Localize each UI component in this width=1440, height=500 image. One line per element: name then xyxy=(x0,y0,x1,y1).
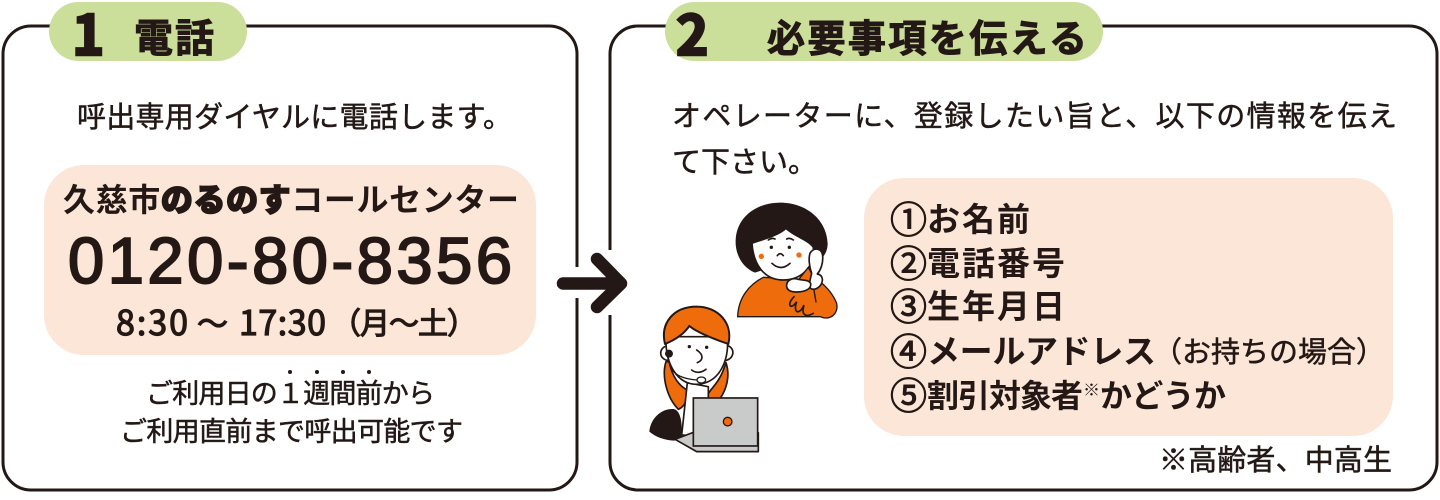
hand xyxy=(787,279,811,292)
hair xyxy=(736,203,828,273)
item 5 xyxy=(890,366,1226,420)
phone cord xyxy=(790,297,813,315)
phone number: 0120-80-8356 xyxy=(68,224,512,297)
start time: 8:30 xyxy=(116,296,188,345)
facial features xyxy=(759,238,802,267)
right hair xyxy=(707,363,728,399)
number 3: ③ xyxy=(890,277,927,331)
item 2 xyxy=(890,234,1065,288)
end time: 17:30 xyxy=(239,296,326,345)
asterisk: ※ xyxy=(1083,376,1100,401)
heading pill xyxy=(49,2,247,61)
sleeve behind phone xyxy=(799,267,815,285)
panel: step 2 tell required items xyxy=(610,0,1437,490)
label suffix: かどうか xyxy=(1100,371,1226,417)
face xyxy=(666,337,728,384)
item 4 xyxy=(890,322,1385,376)
panel frame xyxy=(3,26,577,490)
instruction text xyxy=(672,93,1397,181)
label: phone number: 電話番号 xyxy=(927,237,1065,285)
days: （月～土） xyxy=(331,299,477,343)
arrow: step 1 to step 2 xyxy=(563,259,621,307)
sweater xyxy=(738,277,837,318)
number 5: ⑤ xyxy=(890,366,927,420)
heading pill xyxy=(665,2,1103,61)
required items box xyxy=(864,178,1393,436)
heading text: 必要事項を伝える xyxy=(767,8,1087,63)
label: email address: メールアドレス xyxy=(927,325,1156,373)
call center name: 久慈市のるのすコールセンター xyxy=(63,175,519,221)
item 1 xyxy=(890,190,1030,244)
illustration: woman on telephone xyxy=(736,203,837,318)
item 3 xyxy=(890,277,1065,331)
label: discount eligible: 割引対象者 xyxy=(927,371,1083,417)
intro text: 呼出専用ダイヤルに電話します。 xyxy=(77,94,512,136)
panel: step 1 phone call xyxy=(3,0,577,490)
heading: step 1 xyxy=(49,0,247,71)
face xyxy=(752,228,813,280)
number 2: ② xyxy=(890,234,927,288)
neck and arm xyxy=(682,383,708,436)
box background xyxy=(864,178,1393,436)
orange hair top xyxy=(664,307,729,344)
label: birth date: 生年月日 xyxy=(927,280,1065,328)
tilde: ～ xyxy=(197,299,228,344)
headset xyxy=(665,350,706,383)
instruction line 1: オペレーターに、登録したい旨と、以下の情報を伝え xyxy=(672,93,1397,135)
emphasis dots xyxy=(288,370,371,374)
laptop xyxy=(675,398,758,452)
black sleeve xyxy=(649,409,682,441)
heading: step 2 xyxy=(665,0,1103,71)
opening hours xyxy=(116,296,477,345)
note line 2: ご利用直前まで呼出可能です xyxy=(120,410,463,449)
note: if owned: （お持ちの場合） xyxy=(1153,329,1385,371)
note line 1: ご利用日の１週間前から xyxy=(146,372,435,411)
label: name: お名前 xyxy=(927,193,1030,241)
availability note xyxy=(120,370,463,449)
illustration: operator with headset and laptop xyxy=(649,307,758,452)
call center info box xyxy=(44,165,536,355)
arm crease xyxy=(814,290,816,302)
footnote: ※高齢者、中高生 xyxy=(1159,437,1392,479)
facial features xyxy=(688,345,708,372)
telephone handset xyxy=(809,249,823,289)
panel frame xyxy=(610,26,1437,490)
instruction line 2: て下さい。 xyxy=(672,139,817,181)
heading text: 電話 xyxy=(134,8,214,64)
left hair xyxy=(664,362,688,409)
number 1: ① xyxy=(890,190,927,244)
ears xyxy=(661,345,733,361)
box background xyxy=(44,165,536,355)
number 4: ④ xyxy=(890,322,927,376)
